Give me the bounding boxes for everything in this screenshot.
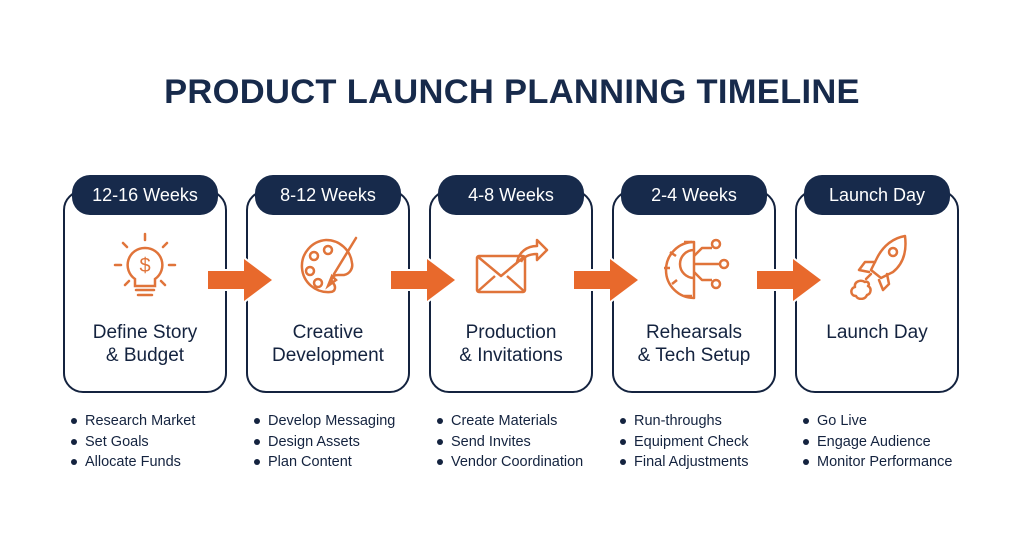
bullets 1: Research Market — [85, 413, 195, 429]
bullets 5: Engage Audience — [817, 434, 931, 450]
icon: rocket — [850, 234, 907, 300]
icon: palette — [300, 236, 358, 294]
bullets 3 — [437, 413, 583, 470]
bullets 2: Design Assets — [268, 434, 360, 450]
card title 4: Rehearsals — [646, 322, 742, 343]
bullets 1 — [71, 413, 196, 470]
panel: stage 1 — [63, 190, 227, 393]
tab: 8-12 Weeks: 8-12 Weeks — [280, 185, 376, 205]
tab: 2-4 Weeks — [621, 175, 767, 215]
bullets 3: Vendor Coordination — [451, 454, 583, 470]
bullets 5: Monitor Performance — [817, 454, 952, 470]
card title 4: & Tech Setup — [638, 345, 750, 366]
card title 1: & Budget — [106, 345, 184, 366]
tab: 12-16 Weeks: 12-16 Weeks — [92, 185, 198, 205]
title: PRODUCT LAUNCH PLANNING TIMELINE — [164, 73, 860, 111]
bullets 3: Send Invites — [451, 434, 531, 450]
card title 3 — [459, 322, 563, 366]
card title 1: Define Story — [93, 322, 197, 343]
card title 2: Creative — [293, 322, 363, 343]
bullets 2 — [254, 413, 395, 470]
arrow 1 — [208, 258, 272, 302]
arrow 3 — [574, 258, 638, 302]
icon: lightbulb dollar: $ — [139, 255, 151, 277]
arrow 2 — [391, 258, 455, 302]
bullets 2: Develop Messaging — [268, 413, 395, 429]
bullets 4: Run-throughs — [634, 413, 722, 429]
bullets 1: Allocate Funds — [85, 454, 181, 470]
tab: Launch Day — [804, 175, 950, 215]
card title 3: & Invitations — [459, 345, 563, 366]
card title 5: Launch Day — [826, 322, 928, 343]
tab: 8-12 Weeks — [255, 175, 401, 215]
tab: 4-8 Weeks — [438, 175, 584, 215]
bullets 1: Set Goals — [85, 434, 149, 450]
bullets 4: Equipment Check — [634, 434, 748, 450]
tab: 2-4 Weeks: 2-4 Weeks — [651, 185, 737, 205]
tab: 4-8 Weeks: 4-8 Weeks — [468, 185, 554, 205]
panel: stage 2 — [246, 190, 410, 393]
bullets 5 — [803, 413, 952, 470]
icon: envelope — [476, 238, 548, 294]
arrow 4 — [757, 258, 821, 302]
panel: stage 5 — [795, 190, 959, 393]
panel: stage 4 — [612, 190, 776, 393]
bullets 2: Plan Content — [268, 454, 352, 470]
card title 1 — [93, 322, 198, 366]
panel: stage 3 — [429, 190, 593, 393]
bullets 5: Go Live — [817, 413, 867, 429]
icon: gear circuit — [664, 238, 730, 300]
card title 3: Production — [466, 322, 556, 343]
card title 4 — [638, 322, 750, 366]
icon: lightbulb dollar — [114, 232, 176, 296]
bullets 4 — [620, 413, 748, 470]
bullets 3: Create Materials — [451, 413, 557, 429]
bullets 4: Final Adjustments — [634, 454, 748, 470]
tab: Launch Day: Launch Day — [829, 185, 925, 205]
tab: 12-16 Weeks — [72, 175, 218, 215]
card title 2 — [272, 322, 384, 366]
card title 2: Development — [272, 345, 384, 366]
